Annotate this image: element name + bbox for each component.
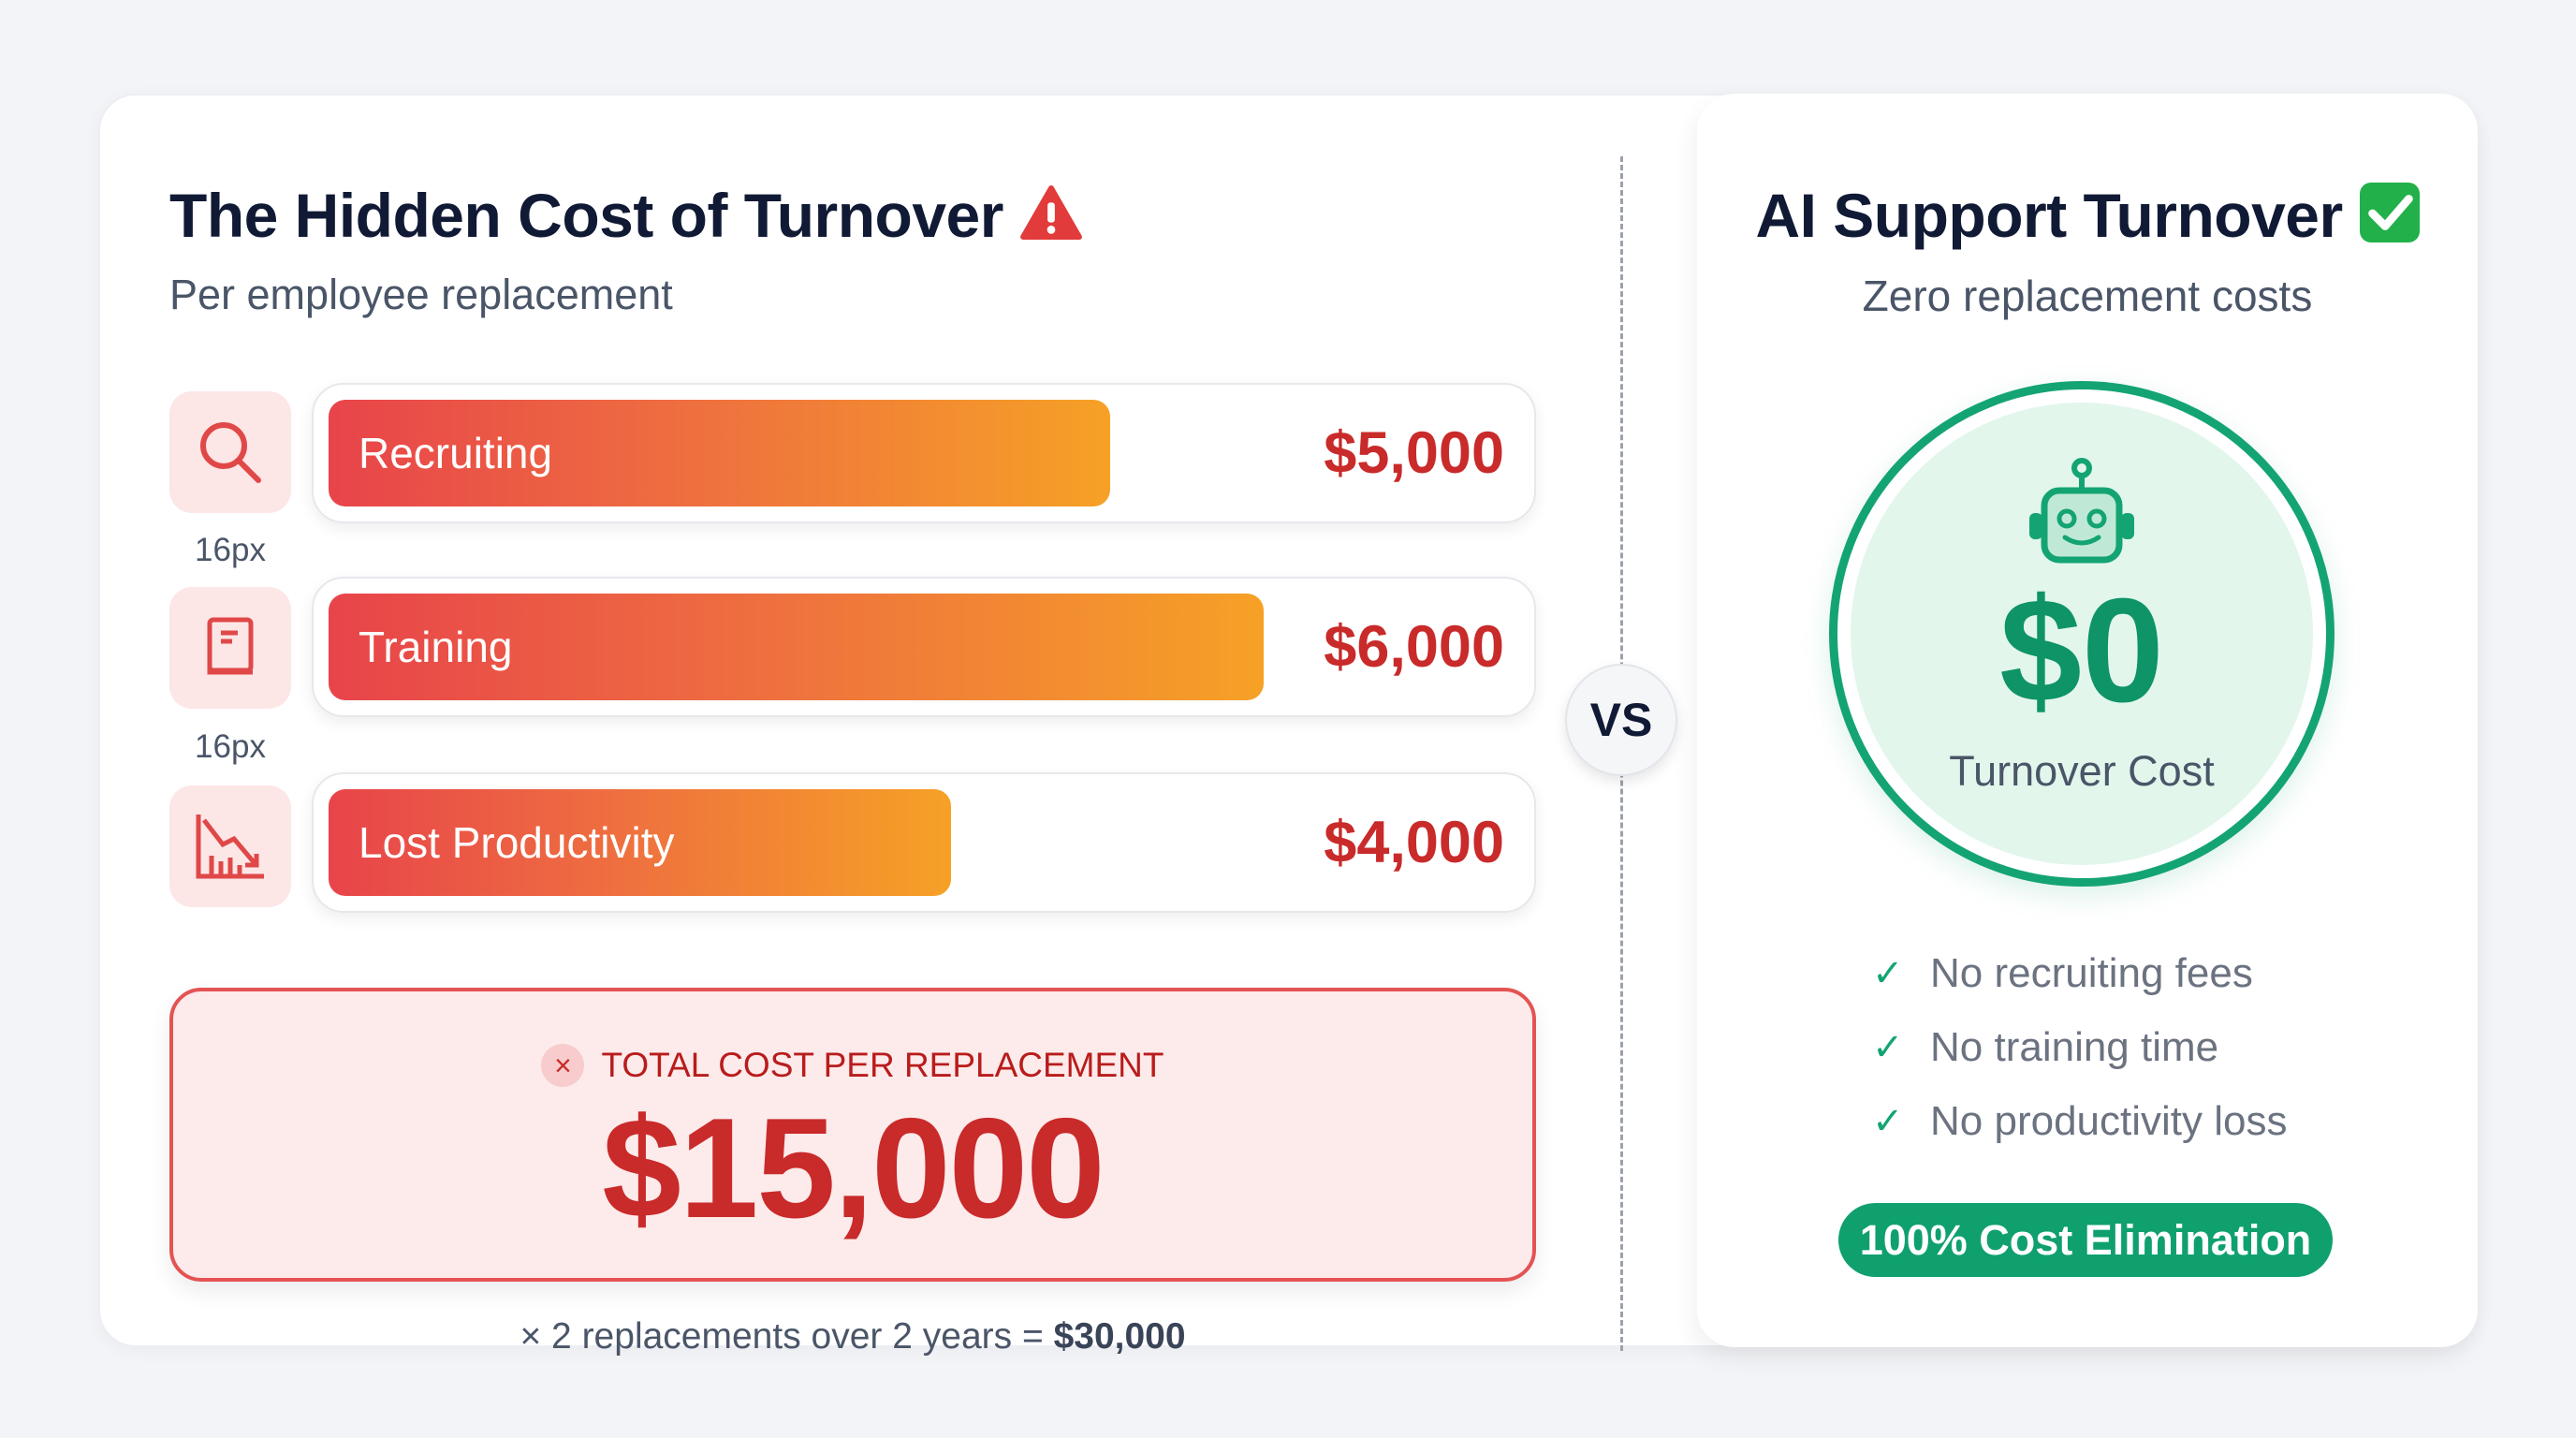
bar: recruiting [312, 383, 1536, 523]
VS badge: VS [1590, 694, 1652, 746]
badge: cost elimination: 100% Cost Elimination [1860, 1215, 2311, 1264]
benefit 3: No productivity loss [1930, 1098, 2287, 1144]
caption: Turnover Cost [1949, 747, 2215, 795]
bar: lost productivity: Lost Productivity [359, 818, 674, 867]
icon: search [169, 391, 291, 513]
spacing label 2: 16px [195, 728, 266, 765]
title left: The Hidden Cost of Turnover [169, 181, 1003, 250]
dashed divider [1620, 156, 1623, 1351]
icon: book [169, 587, 291, 709]
subtitle right: Zero replacement costs [1863, 271, 2312, 320]
benefit 3: ✓ [1872, 1101, 1904, 1142]
total label: × [554, 1049, 572, 1082]
bar: training: $6,000 [1324, 614, 1504, 680]
bar: recruiting: Recruiting [359, 429, 552, 477]
zero value: $0 [1999, 568, 2164, 733]
benefits list [1872, 950, 2287, 1144]
bar: lost productivity: $4,000 [1324, 810, 1504, 875]
icon: declining chart [169, 785, 291, 907]
total value: $15,000 [602, 1089, 1104, 1248]
total cost box [169, 988, 1536, 1282]
spacing label 1: 16px [195, 532, 266, 568]
bar: training [312, 577, 1536, 717]
title right: AI Support Turnover [1755, 181, 2343, 250]
benefit 2: No training time [1930, 1024, 2218, 1070]
benefit 1: ✓ [1872, 953, 1904, 994]
bar: recruiting: $5,000 [1324, 420, 1504, 486]
subtitle left: Per employee replacement [169, 271, 673, 318]
benefit 2: ✓ [1872, 1027, 1904, 1068]
VS badge [1565, 664, 1677, 776]
panel: AI support card [1697, 94, 2478, 1347]
bar: lost productivity [312, 772, 1536, 913]
total label: TOTAL COST PER REPLACEMENT [601, 1046, 1164, 1084]
bar: training: Training [359, 623, 512, 671]
icon: robot [2029, 458, 2134, 564]
zero cost circle [1829, 381, 2334, 887]
benefit 1: No recruiting fees [1930, 950, 2253, 996]
footnote: × 2 replacements over 2 years = $30,000 [520, 1316, 1186, 1357]
badge: cost elimination [1838, 1203, 2333, 1277]
